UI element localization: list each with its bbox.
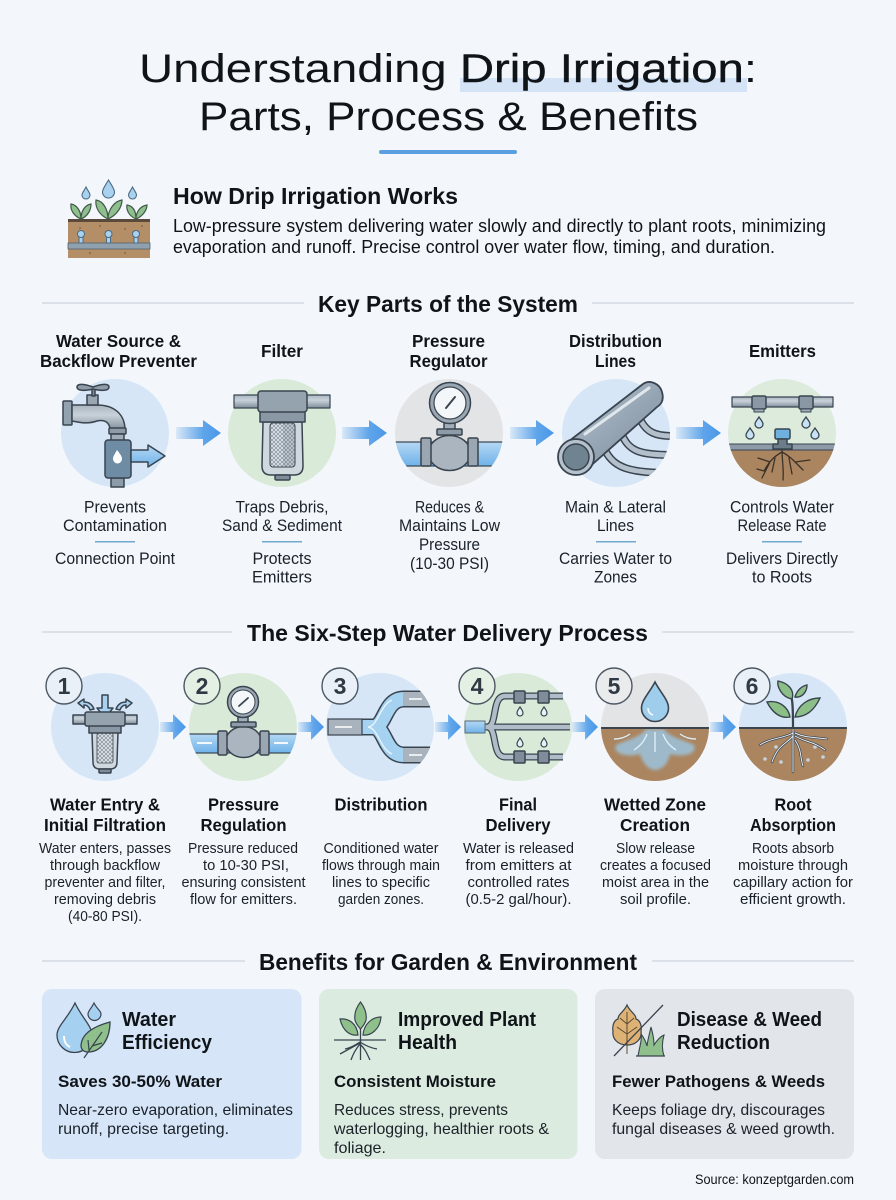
step description xyxy=(322,841,440,908)
step description: creates a focused xyxy=(600,858,711,874)
icon: crossed leaf and weeds xyxy=(613,1005,665,1056)
title underline xyxy=(379,150,517,154)
part caption: (10-30 PSI) xyxy=(410,555,489,573)
arrow xyxy=(435,714,461,740)
step description: capillary action for xyxy=(733,875,853,891)
panel: benefits xyxy=(42,949,854,1159)
part caption: Zones xyxy=(594,568,637,586)
card title xyxy=(398,1008,536,1054)
icon: regulator with gauge xyxy=(186,673,301,781)
step title: Pressure xyxy=(208,794,279,814)
part: emitters xyxy=(725,341,840,586)
icon: plant with absorbing roots xyxy=(738,673,850,783)
title xyxy=(139,47,757,139)
card title: Reduction xyxy=(677,1031,770,1054)
icon: drop over wetted soil xyxy=(600,673,712,783)
card body xyxy=(333,1102,549,1157)
card subheading: Consistent Moisture xyxy=(334,1072,496,1091)
step description: through backflow xyxy=(50,858,161,874)
step title: Wetted Zone xyxy=(604,794,706,814)
part caption: Protects xyxy=(252,550,312,568)
part caption: Carries Water to xyxy=(559,550,672,568)
section heading: benefits: Benefits for Garden & Environment xyxy=(259,949,637,975)
step 5: wetted zone xyxy=(596,668,712,908)
card title: Improved Plant xyxy=(398,1008,536,1031)
part caption: Emitters xyxy=(252,568,312,586)
part caption: Release Rate xyxy=(738,517,826,535)
card: water efficiency xyxy=(42,989,302,1159)
card: disease and weed reduction xyxy=(595,989,854,1159)
part caption xyxy=(222,498,342,586)
step 4: final delivery xyxy=(459,668,574,908)
step description xyxy=(600,841,711,908)
step 6: root absorption xyxy=(733,668,853,908)
step badge 6 xyxy=(734,668,770,704)
part caption: Connection Point xyxy=(55,550,175,568)
step badge 4: 4 xyxy=(471,673,484,699)
step 3: distribution xyxy=(322,668,440,908)
step badge 3: 3 xyxy=(334,673,346,699)
part title: Water Source & xyxy=(56,331,181,351)
card subheading: Saves 30-50% Water xyxy=(58,1072,222,1091)
intro panel: how drip irrigation works xyxy=(68,180,826,258)
part caption: Lines xyxy=(597,517,634,535)
step badge 4 xyxy=(459,668,495,704)
step title: Final xyxy=(499,794,537,814)
card body: Near-zero evaporation, eliminates xyxy=(58,1102,293,1119)
panel: key parts of the system xyxy=(40,291,854,586)
step badge 1 xyxy=(46,668,82,704)
step description: soil profile. xyxy=(620,892,691,908)
step description: garden zones. xyxy=(338,892,424,908)
part title: Distribution xyxy=(569,331,662,351)
part title: Emitters xyxy=(749,341,816,361)
step description xyxy=(39,841,171,925)
step title xyxy=(200,794,286,835)
section heading: key parts: Key Parts of the System xyxy=(318,291,578,317)
step title xyxy=(486,794,551,835)
panel: six-step process xyxy=(39,620,854,925)
intro heading: How Drip Irrigation Works xyxy=(173,183,458,209)
step description: Water enters, passes xyxy=(39,841,171,857)
icon: main and lateral pipes xyxy=(558,379,672,487)
step description: lines to specific xyxy=(332,875,430,891)
card title: Disease & Weed xyxy=(677,1008,822,1031)
card subheading: Fewer Pathogens & Weeds xyxy=(612,1072,825,1091)
card body xyxy=(612,1102,835,1138)
part caption: Traps Debris, xyxy=(236,498,328,516)
intro body text xyxy=(173,215,826,257)
icon: seedlings with buried drip line xyxy=(68,180,150,258)
title: Understanding Drip Irrigation : xyxy=(139,47,757,91)
card body xyxy=(58,1102,293,1138)
part title: Backflow Preventer xyxy=(40,351,197,371)
step description: Conditioned water xyxy=(324,841,439,857)
step description: Slow release xyxy=(616,841,695,857)
part: distribution lines xyxy=(558,331,672,586)
part: pressure regulator xyxy=(392,331,507,573)
step badge 5 xyxy=(596,668,632,704)
card body: Keeps foliage dry, discourages xyxy=(612,1102,825,1119)
icon: sediment filter xyxy=(228,379,336,487)
arrow xyxy=(176,420,221,446)
card: improved plant health xyxy=(319,989,578,1159)
step description: moist area in the xyxy=(602,875,709,891)
step title: Creation xyxy=(620,815,690,835)
icon: water entering filter xyxy=(51,673,159,781)
part title: Filter xyxy=(261,341,303,361)
icon: water drops and leaf xyxy=(57,1003,110,1058)
card title: Health xyxy=(398,1031,457,1054)
card body: Reduces stress, prevents xyxy=(334,1102,508,1119)
step description: (40-80 PSI). xyxy=(68,909,142,925)
step description: (0.5-2 gal/hour). xyxy=(466,892,572,908)
step description: moisture through xyxy=(738,858,848,874)
step badge 3 xyxy=(322,668,358,704)
icon: lateral lines with emitters xyxy=(464,673,572,781)
step title: Regulation xyxy=(200,815,286,835)
step description xyxy=(463,841,574,908)
step description: controlled rates xyxy=(468,875,570,891)
card body: fungal diseases & weed growth. xyxy=(612,1121,835,1138)
card title xyxy=(677,1008,822,1054)
part caption: Contamination xyxy=(63,517,167,535)
part title: Lines xyxy=(595,351,636,371)
part title xyxy=(40,331,197,371)
step description: from emitters at xyxy=(466,858,572,874)
step title: Distribution xyxy=(334,794,428,814)
step description xyxy=(182,841,306,908)
part caption: Controls Water xyxy=(730,498,834,516)
step description: efficient growth. xyxy=(740,892,846,908)
arrow xyxy=(342,420,387,446)
icon: emitters dripping onto roots xyxy=(725,379,840,489)
step badge 1: 1 xyxy=(58,673,71,699)
step title xyxy=(750,794,836,835)
part caption xyxy=(726,498,839,586)
part caption: Pressure xyxy=(419,536,480,554)
step 2: pressure regulation xyxy=(182,668,306,908)
card title: Efficiency xyxy=(122,1031,213,1054)
step badge 5: 5 xyxy=(608,673,621,699)
part title: Regulator xyxy=(410,351,488,371)
step title: Water Entry & xyxy=(50,794,160,814)
step description: to 10-30 PSI, xyxy=(203,858,289,874)
step badge 2 xyxy=(184,668,220,704)
arrow xyxy=(676,420,721,446)
step badge 6: 6 xyxy=(746,673,758,699)
step title: Delivery xyxy=(486,815,551,835)
intro body text: Low-pressure system delivering water slowly and directly to plant roots, minimizing xyxy=(173,215,826,236)
part caption: Sand & Sediment xyxy=(222,517,342,535)
card title xyxy=(122,1008,213,1054)
step description: ensuring consistent xyxy=(182,875,306,891)
section heading: six-step process: The Six-Step Water Delivery Process xyxy=(247,620,648,646)
arrow xyxy=(710,714,736,740)
step title: Root xyxy=(774,794,812,814)
part title xyxy=(410,331,488,371)
part title: Pressure xyxy=(412,331,485,351)
part caption: Reduces & xyxy=(415,498,484,516)
arrow xyxy=(572,714,598,740)
step description: preventer and filter, xyxy=(44,875,166,891)
step description: Pressure reduced xyxy=(188,841,298,857)
arrow xyxy=(510,420,554,446)
part caption xyxy=(559,498,672,586)
step title: Initial Filtration xyxy=(44,815,166,835)
step badge 2: 2 xyxy=(196,673,208,699)
part caption xyxy=(399,498,500,573)
source credit: Source: konzeptgarden.com xyxy=(695,1172,854,1187)
part: water source and backflow preventer xyxy=(40,331,197,568)
step title xyxy=(604,794,706,835)
part caption xyxy=(55,498,175,568)
step description: removing debris xyxy=(54,892,156,908)
title: Parts, Process & Benefits xyxy=(199,95,698,139)
part title xyxy=(569,331,662,371)
icon: pressure gauge on pipe xyxy=(392,379,507,487)
card body: waterlogging, healthier roots & xyxy=(333,1121,549,1138)
icon: plant with roots xyxy=(334,1002,386,1060)
part caption: Maintains Low xyxy=(399,517,500,535)
step title xyxy=(44,794,166,835)
card body: runoff, precise targeting. xyxy=(58,1121,229,1138)
step description: Water is released xyxy=(463,841,574,857)
arrow xyxy=(160,714,186,740)
step description xyxy=(733,841,853,908)
card body: foliage. xyxy=(334,1140,386,1157)
part: filter xyxy=(222,341,342,586)
part caption: to Roots xyxy=(752,568,812,586)
card title: Water xyxy=(122,1008,176,1031)
step description: flow for emitters. xyxy=(190,892,297,908)
step 1: water entry xyxy=(39,668,171,925)
part caption: Delivers Directly xyxy=(726,550,839,568)
step description: flows through main xyxy=(322,858,440,874)
part caption: Main & Lateral xyxy=(565,498,666,516)
step title: Absorption xyxy=(750,815,836,835)
intro body text: evaporation and runoff. Precise control over water flow, timing, and duration. xyxy=(173,236,775,257)
icon: branching pipe xyxy=(326,673,436,781)
arrow xyxy=(298,714,324,740)
step description: Roots absorb xyxy=(752,841,834,857)
part caption: Prevents xyxy=(84,498,146,516)
icon: faucet with backflow valve xyxy=(61,379,169,487)
